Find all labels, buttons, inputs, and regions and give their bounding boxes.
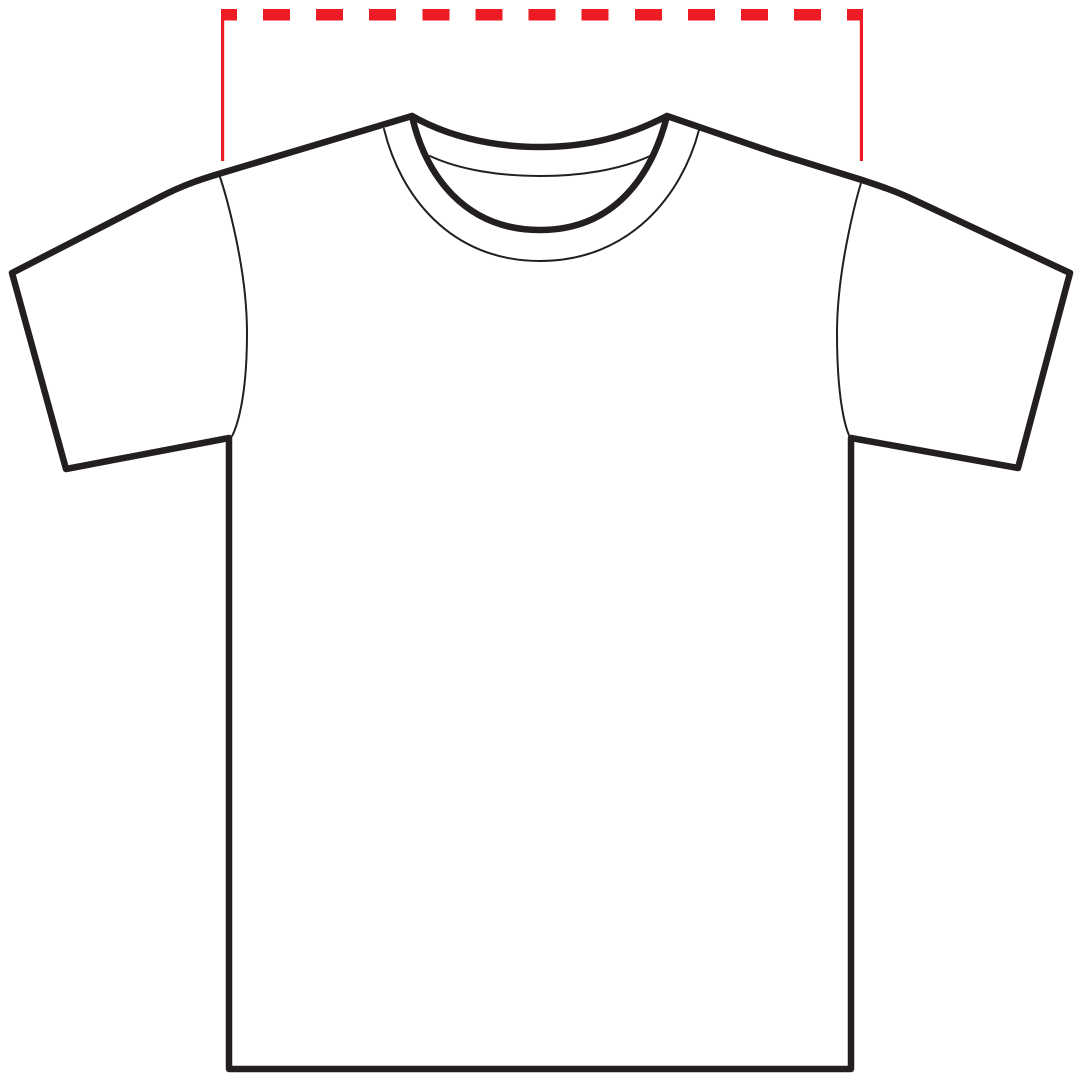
collar: thin neck rib line xyxy=(430,156,650,176)
collar: thick inner neckline xyxy=(412,116,667,230)
collar: thin outer seam xyxy=(384,129,699,261)
left sleeve seam xyxy=(220,177,247,436)
measurement bracket: red dashed line across shoulders xyxy=(221,9,863,161)
right sleeve seam xyxy=(837,183,861,435)
